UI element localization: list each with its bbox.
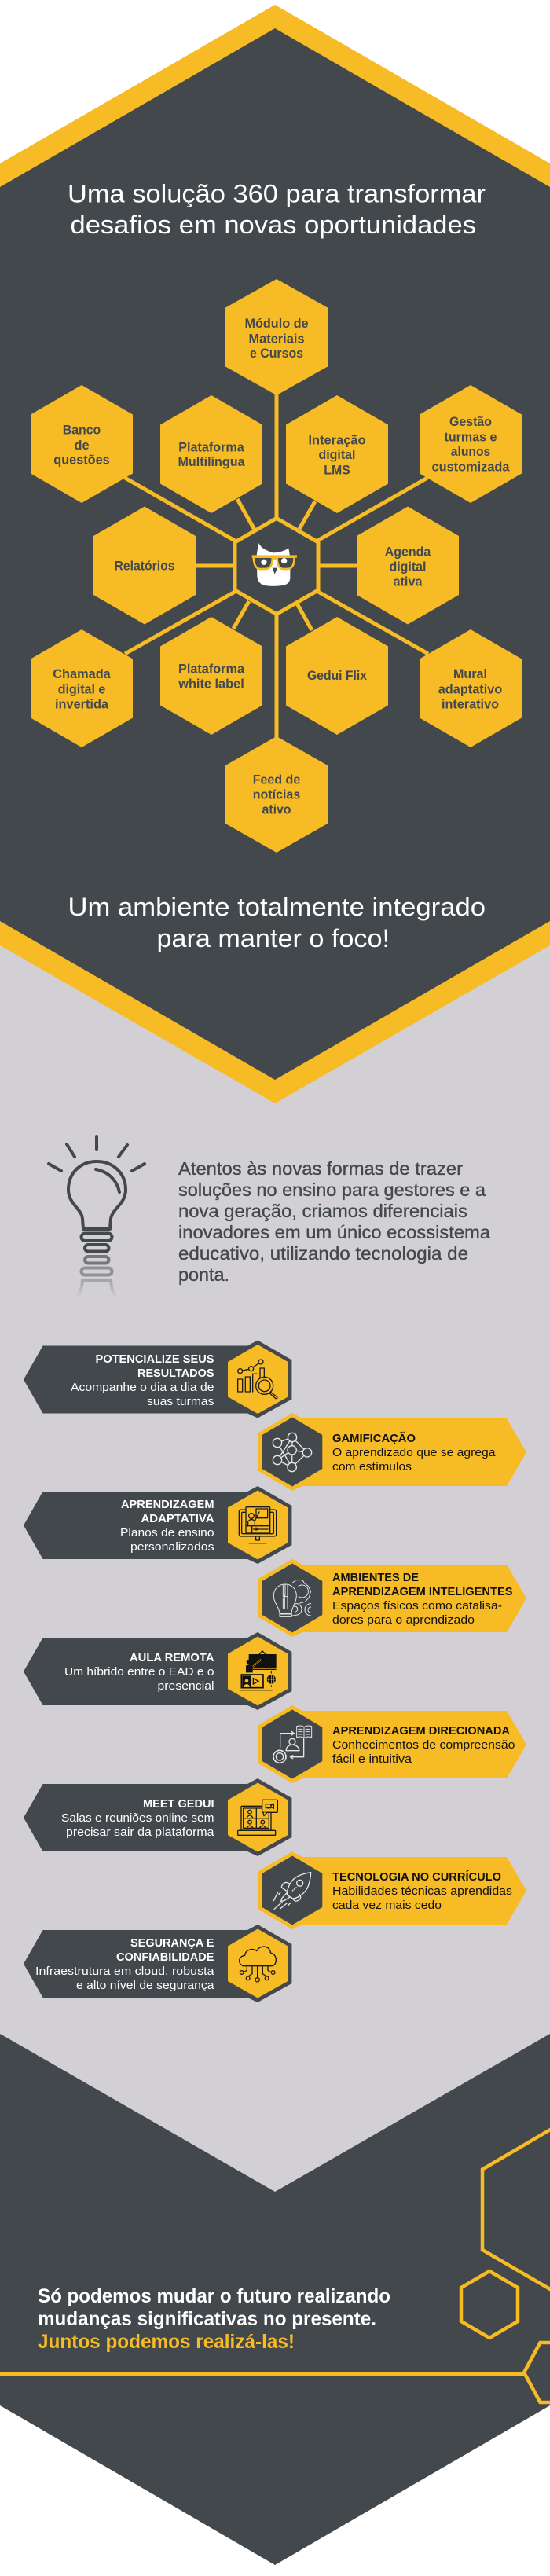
icon: cloud network [240,1947,276,1982]
hexagon: Chamada digital e invertida: invertida [55,696,109,712]
closing heading of top panel: para manter o foco! [157,924,390,952]
icon: light bulb [49,1136,145,1298]
closing heading of top panel [68,893,486,952]
intro paragraph: educativo, utilizando tecnologia de [178,1243,468,1264]
intro paragraph: soluções no ensino para gestores e a [178,1180,486,1200]
hexagon: Relatórios: Relatórios [115,558,174,574]
feature: Potencialize seus resultados: RESULTADOS [138,1367,214,1380]
hexagon: Módulo de Materiais e Cursos: Materiais [248,332,305,346]
hexagon: Interação digital LMS: LMS [324,462,350,478]
hexagon: Mural adaptativo interativo: interativo [442,696,499,712]
feature: Potencialize seus resultados: suas turmas [147,1395,214,1408]
intro paragraph: ponta. [178,1264,229,1285]
hexagon: Agenda digital ativa [357,506,459,624]
closing message: mudanças significativas no presente. [38,2308,376,2330]
feature: Potencialize seus resultados [24,1341,292,1418]
feature: Segurança e confiabilidade: Infraestrutura em cloud, robusta [35,1965,214,1978]
hexagon: Gestão turmas e alunos customizada: turmas e [445,429,497,445]
hexagon: Gestão turmas e alunos customizada [420,385,522,503]
feature: Aula remota: AULA REMOTA [130,1651,214,1664]
feature: Potencialize seus resultados: POTENCIALIZE SEUS [96,1352,214,1366]
hexagon: Agenda digital ativa: digital [390,560,426,574]
icon: bulb and gears [273,1580,311,1616]
feature: Gamificação [258,1413,526,1491]
feature: Ambientes de aprendizagem inteligentes: APRENDIZAGEM INTELIGENTES [332,1585,512,1598]
feature: Aula remota: presencial [157,1679,214,1693]
intro paragraph: inovadores em um único ecossistema [178,1222,490,1242]
hexagon: Feed de notícias ativo [226,736,328,853]
feature: Aprendizagem direcionada: APRENDIZAGEM DIRECIONADA [332,1724,510,1738]
hexagon: Feed de notícias ativo: ativo [262,802,291,817]
feature: Segurança e confiabilidade: e alto nível de segurança [76,1979,214,1992]
hexagon: Relatórios [94,506,196,624]
hub connector lines [125,393,428,739]
hexagon: Interação digital LMS: digital [319,447,355,462]
hexagon: Plataforma white label [160,617,262,735]
intro paragraph [178,1158,490,1285]
feature: Ambientes de aprendizagem inteligentes: AMBIENTES DE [332,1571,419,1584]
closing message: Só podemos mudar o futuro realizando [38,2285,390,2307]
feature: Aprendizagem adaptativa: ADAPTATIVA [141,1512,214,1525]
closing message [38,2285,390,2353]
hexagon: Banco de questões: questões [53,453,110,467]
hub hexagon with owl logo [235,519,318,615]
feature: Aprendizagem adaptativa: personalizados [130,1540,214,1554]
panel: bottom dark banner [0,2034,550,2565]
hexagon: Mural adaptativo interativo: adaptativo [438,682,502,696]
hexagon: Banco de questões [31,385,133,503]
title [68,179,486,239]
hexagon: Módulo de Materiais e Cursos: Módulo de [245,316,308,331]
feature: Meet Gedui: MEET GEDUI [143,1797,214,1811]
hexagon: Agenda digital ativa: ativa [393,574,423,589]
decorative hexagon outlines [0,2129,550,2402]
feature: Aprendizagem direcionada [258,1705,526,1783]
title: Uma solução 360 para transformar [68,179,486,207]
title: desafios em novas oportunidades [71,211,476,239]
icon: remote class [240,1651,277,1690]
feature: Gamificação: O aprendizado que se agrega [332,1446,496,1459]
hexagon: Gedui Flix [286,617,388,735]
feature: Meet Gedui: precisar sair da plataforma [66,1826,214,1839]
icon: network nodes [273,1433,312,1472]
feature: Aprendizagem direcionada: fácil e intuitiva [332,1752,412,1766]
feature: Aprendizagem direcionada: Conhecimentos de compreensão [332,1738,515,1752]
feature: Segurança e confiabilidade: SEGURANÇA E [130,1936,214,1950]
feature: Meet Gedui: Salas e reuniões online sem [61,1811,214,1825]
hexagon: Gedui Flix: Gedui Flix [307,668,367,683]
hexagon: Plataforma Multilíngua: Multilíngua [178,454,245,469]
intro paragraph: Atentos às novas formas de trazer [178,1158,463,1179]
hexagon: Agenda digital ativa: Agenda [385,544,431,560]
hexagon: Plataforma Multilíngua: Plataforma [178,440,244,454]
hexagon: Feed de notícias ativo: notícias [253,787,300,802]
feature: Tecnologia no currículo [258,1851,526,1929]
feature: Segurança e confiabilidade [24,1925,292,2002]
icon: owl with glasses [252,543,297,586]
hexagon: Plataforma white label: white label [178,676,244,692]
hexagon: Interação digital LMS: Interação [308,432,366,448]
closing heading of top panel: Um ambiente totalmente integrado [68,893,486,921]
hexagon: Banco de questões: Banco [63,423,101,437]
icon: rocket [273,1873,311,1909]
intro paragraph: nova geração, criamos diferenciais [178,1201,468,1221]
feature: Tecnologia no currículo: TECNOLOGIA NO CURRÍCULO [332,1870,501,1884]
hexagon: Chamada digital e invertida [31,629,133,747]
feature: Tecnologia no currículo: cada vez mais cedo [332,1899,442,1912]
feature: Ambientes de aprendizagem inteligentes: dores para o aprendizado [332,1613,475,1627]
feature: Aula remota: Um híbrido entre o EAD e o [64,1665,214,1679]
feature: Gamificação: GAMIFICAÇÃO [332,1431,416,1445]
feature: Potencialize seus resultados: Acompanhe o dia a dia de [71,1381,214,1394]
feature: Gamificação: com estímulos [332,1460,412,1473]
feature: Aula remota [24,1632,292,1710]
feature: Aprendizagem adaptativa: APRENDIZAGEM [121,1498,214,1511]
feature: Tecnologia no currículo: Habilidades técnicas aprendidas [332,1884,512,1898]
hexagon: Mural adaptativo interativo: Mural [453,666,487,681]
hexagon: Gestão turmas e alunos customizada: alunos [451,444,490,459]
closing message: Juntos podemos realizá-las! [38,2331,295,2353]
hexagon: Plataforma white label: Plataforma [178,662,245,676]
feature: Ambientes de aprendizagem inteligentes [258,1559,526,1637]
hexagon: Chamada digital e invertida: Chamada [53,666,111,681]
panel: top hexagon banner [0,5,550,1103]
hexagon: Feed de notícias ativo: Feed de [253,772,300,787]
hexagon: Banco de questões: de [74,438,90,453]
feature: Aprendizagem adaptativa: Planos de ensino [120,1526,214,1539]
feature: Segurança e confiabilidade: CONFIABILIDADE [116,1950,214,1964]
icon: video meeting laptop [238,1800,277,1835]
hexagon: Chamada digital e invertida: digital e [58,682,105,696]
icon: person, book and gear cycle [273,1726,312,1763]
hexagon: Mural adaptativo interativo [420,629,522,747]
feature: Aprendizagem adaptativa [24,1486,292,1564]
hexagon: Gestão turmas e alunos customizada: Gestão [449,414,492,429]
feature: Ambientes de aprendizagem inteligentes: Espaços físicos como catalisa- [332,1599,502,1613]
hexagon: Gestão turmas e alunos customizada: customizada [432,459,510,475]
hexagon: Módulo de Materiais e Cursos: e Cursos [250,346,303,361]
icon: monitor with teacher [239,1507,277,1543]
hexagon: Interação digital LMS [286,395,388,513]
feature: Meet Gedui [24,1778,292,1856]
hexagon: Plataforma Multilíngua [160,395,262,513]
icon: chart and magnifier [238,1360,277,1399]
hexagon: Módulo de Materiais e Cursos [226,279,328,395]
